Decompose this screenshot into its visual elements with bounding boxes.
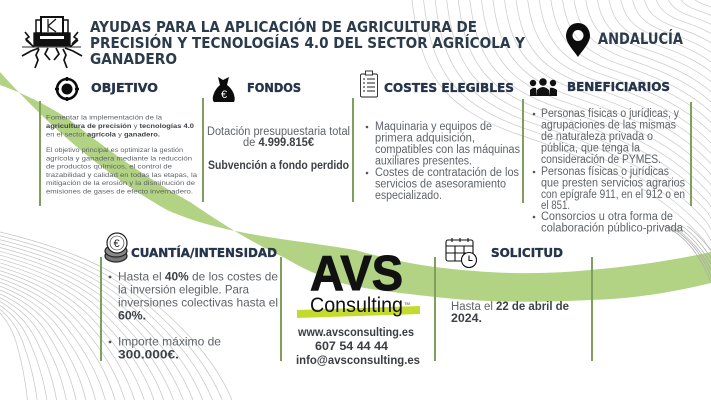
text block: emisiones de gases de efecto invernadero.	[46, 188, 193, 196]
heading: SOLICITUD	[491, 245, 563, 260]
list: Maquinaria y equipos de	[375, 121, 492, 133]
text block: Dotación presupuestaria total	[207, 126, 350, 138]
list: la inversión elegible. Para	[118, 282, 249, 296]
list	[533, 108, 685, 234]
heading: OBJETIVO	[91, 80, 158, 95]
text block: agrícola y ganadera mediante la reducción	[46, 155, 192, 162]
list: con epígrafe 911, en el 912 o en	[541, 189, 685, 201]
heading: BENEFICIARIOS	[567, 79, 670, 94]
list: pública, que tenga la	[541, 142, 641, 154]
panel: solicitud	[435, 238, 592, 361]
icon: calendar	[446, 238, 476, 268]
list: Personas físicas o jurídicas, y	[541, 108, 679, 120]
list: servicios de asesoramiento	[375, 178, 506, 190]
title: GANADERO	[90, 50, 177, 68]
logo: AVS Consulting: AVS	[310, 247, 403, 301]
icon: target	[55, 77, 79, 101]
icon: money bag: €	[221, 89, 227, 101]
list: especializado.	[375, 190, 442, 202]
heading: FONDOS	[247, 80, 301, 95]
icon: location pin	[566, 23, 590, 57]
panel: objetivo	[40, 77, 197, 206]
heading: COSTES ELEGIBLES	[384, 80, 514, 95]
list: inversiones colectivas hasta el	[118, 296, 278, 310]
list: de naturaleza privada o	[541, 131, 653, 143]
list: agrupaciones de las mismas	[541, 120, 676, 132]
list: que presten servicios agrarios	[541, 178, 685, 190]
logo: AVS Consulting	[297, 247, 420, 318]
green swoosh band	[0, 72, 711, 302]
list: compatibles con las máquinas	[375, 144, 520, 156]
text block	[207, 126, 350, 172]
line pattern: bottom left	[0, 232, 232, 400]
list: Hasta el 40% de los costes de	[118, 270, 278, 284]
list	[366, 121, 520, 202]
contact details: 607 54 44 44	[315, 339, 388, 353]
panel: beneficiarios	[523, 78, 691, 234]
list: Consorcios u otra forma de	[541, 211, 673, 223]
icon: clipboard	[360, 71, 378, 97]
text block: mitigación de la erosión y la disminución de	[46, 180, 195, 187]
text block: Hasta el 22 de abril de	[451, 301, 569, 313]
panel: costes elegibles	[360, 71, 520, 202]
list: Personas físicas o jurídicas	[541, 166, 669, 178]
logo: AVS Consulting: Consulting	[310, 294, 403, 317]
panel: cuantía/intensidad	[101, 233, 281, 362]
text block: Fomentar la implementación de la	[46, 114, 162, 122]
title: AYUDAS PARA LA APLICACIÓN DE AGRICULTURA DE	[90, 17, 477, 36]
list: 300.000€.	[118, 348, 179, 362]
text block	[451, 301, 569, 325]
text block: agricultura de precisión y tecnologías 4.0	[46, 123, 194, 130]
text block: en el sector agrícola y ganadero.	[46, 132, 160, 138]
icon: coins: €	[113, 238, 120, 250]
line pattern: right edge fold	[664, 226, 711, 282]
list: auxiliares presentes.	[375, 156, 472, 168]
text block: de productos químicos, el control de	[46, 164, 172, 171]
list: Costes de contratación de los	[375, 167, 519, 179]
text block: trazabilidad y calidad en todas las etapas, la	[46, 172, 197, 179]
list: Importe máximo de	[118, 335, 221, 349]
line pattern: top right	[412, 0, 711, 300]
list: colaboración público-privada	[541, 222, 684, 234]
icon: tractor	[22, 17, 82, 68]
contact details	[296, 325, 420, 367]
icon: coins	[105, 233, 127, 262]
heading: CUANTÍA/INTENSIDAD	[131, 245, 277, 260]
contact details: www.avsconsulting.es	[297, 325, 414, 339]
text block: Subvención a fondo perdido	[208, 160, 349, 172]
list: el 851.	[541, 200, 570, 212]
icon: money bag	[213, 77, 235, 102]
list: primera adquisición,	[375, 132, 475, 144]
list: consideración de PYMES.	[541, 154, 661, 166]
logo: AVS Consulting: TM	[404, 301, 410, 306]
region label: ANDALUCÍA	[598, 29, 683, 48]
text block	[46, 114, 197, 196]
text block: El objetivo principal es optimizar la gestión	[46, 147, 183, 154]
text block: de 4.999.815€	[243, 137, 315, 149]
list	[109, 270, 278, 362]
list: 60%.	[118, 308, 146, 322]
panel: fondos	[203, 77, 353, 202]
title: PRECISIÓN Y TECNOLOGÍAS 4.0 DEL SECTOR AGRÍCOLA Y	[90, 33, 526, 52]
contact details: info@avsconsulting.es	[296, 353, 420, 367]
icon: people	[530, 78, 557, 96]
text block: 2024.	[451, 313, 482, 325]
title	[90, 17, 526, 68]
